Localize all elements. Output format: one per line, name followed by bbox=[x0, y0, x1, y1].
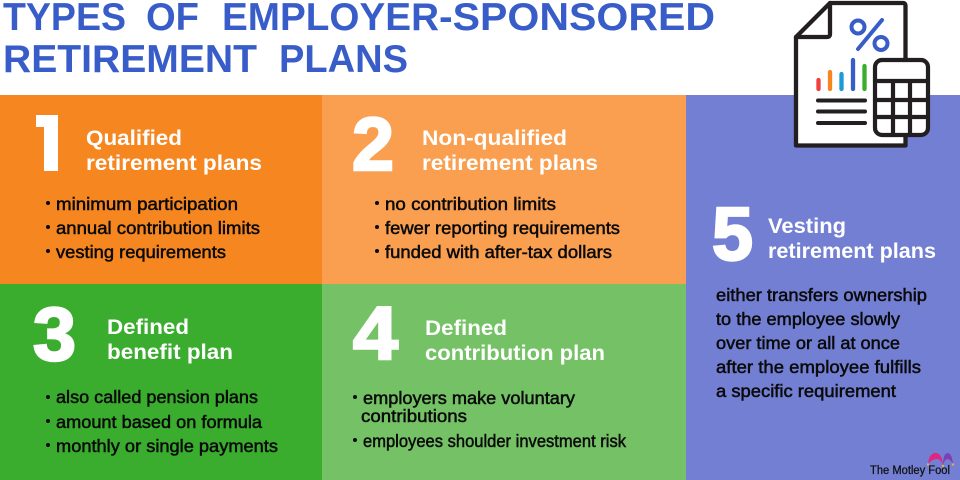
bullet list 2: fewer reporting requirements bbox=[385, 218, 620, 238]
panel: 5 vesting retirement plans bbox=[686, 95, 960, 480]
heading 4: Defined bbox=[425, 317, 507, 340]
heading 1: Qualified bbox=[86, 127, 182, 150]
document sheet bbox=[796, 3, 906, 146]
percent sign bbox=[852, 20, 888, 50]
logo: The Motley Fool bbox=[870, 453, 954, 477]
calculator bbox=[875, 60, 928, 135]
bullet list 1 bbox=[46, 194, 260, 262]
heading 5 bbox=[768, 215, 936, 263]
number 5: 5 bbox=[712, 192, 753, 276]
icon: document with percent and calculator bbox=[796, 3, 928, 146]
heading 1 bbox=[86, 127, 262, 175]
bullet list 3: also called pension plans bbox=[56, 387, 258, 407]
description 5: either transfers ownership bbox=[716, 285, 927, 305]
description 5: over time or all at once bbox=[716, 333, 900, 353]
bullet list 2 bbox=[375, 194, 620, 262]
bullet list 4: employers make voluntary bbox=[363, 388, 575, 408]
bullet list 2: no contribution limits bbox=[385, 194, 556, 214]
panel: 2 non-qualified retirement plans bbox=[322, 95, 686, 284]
heading 2: retirement plans bbox=[422, 152, 598, 175]
heading 5: retirement plans bbox=[768, 240, 936, 263]
heading 5: Vesting bbox=[768, 215, 846, 238]
heading 4: contribution plan bbox=[425, 342, 605, 365]
number 4: 4 bbox=[353, 291, 398, 375]
bar chart bbox=[818, 60, 864, 89]
description 5: to the employee slowly bbox=[716, 309, 900, 329]
heading 2: Non-qualified bbox=[422, 127, 567, 150]
bullet list 4 bbox=[353, 388, 626, 451]
title bbox=[3, 0, 715, 81]
bullet list 2: funded with after-tax dollars bbox=[385, 242, 612, 262]
logo: The Motley Fool: The Motley Fool bbox=[870, 465, 950, 477]
heading 4 bbox=[425, 317, 605, 365]
bullet list 1: minimum participation bbox=[56, 194, 238, 214]
jester hat bbox=[927, 453, 954, 467]
bullet list 1: vesting requirements bbox=[56, 242, 226, 262]
text lines bbox=[818, 100, 865, 123]
heading 1: retirement plans bbox=[86, 152, 262, 175]
panel: 3 defined benefit plan bbox=[0, 284, 322, 480]
description 5 bbox=[716, 285, 927, 401]
title: PLANS bbox=[279, 38, 408, 81]
bullet list 3 bbox=[46, 387, 278, 456]
heading 3: benefit plan bbox=[107, 341, 233, 364]
bullet list 4: contributions bbox=[361, 406, 467, 426]
title: RETIREMENT bbox=[3, 38, 257, 81]
heading 3: Defined bbox=[107, 316, 189, 339]
description 5: a specific requirement bbox=[716, 381, 896, 401]
folded corner bbox=[796, 3, 830, 37]
bullet list 3: monthly or single payments bbox=[56, 436, 278, 456]
bullet list 4: employees shoulder investment risk bbox=[363, 431, 626, 451]
bullet list 3: amount based on formula bbox=[56, 412, 262, 432]
panel: 4 defined contribution plan bbox=[322, 284, 686, 480]
number 3: 3 bbox=[33, 292, 76, 376]
description 5: after the employee fulfills bbox=[716, 357, 921, 377]
panel: 1 qualified retirement plans bbox=[0, 95, 322, 284]
heading 3 bbox=[107, 316, 233, 364]
number 2: 2 bbox=[352, 102, 394, 186]
heading 2 bbox=[422, 127, 598, 175]
bullet list 1: annual contribution limits bbox=[56, 218, 260, 238]
number 1: 1 bbox=[30, 103, 64, 187]
